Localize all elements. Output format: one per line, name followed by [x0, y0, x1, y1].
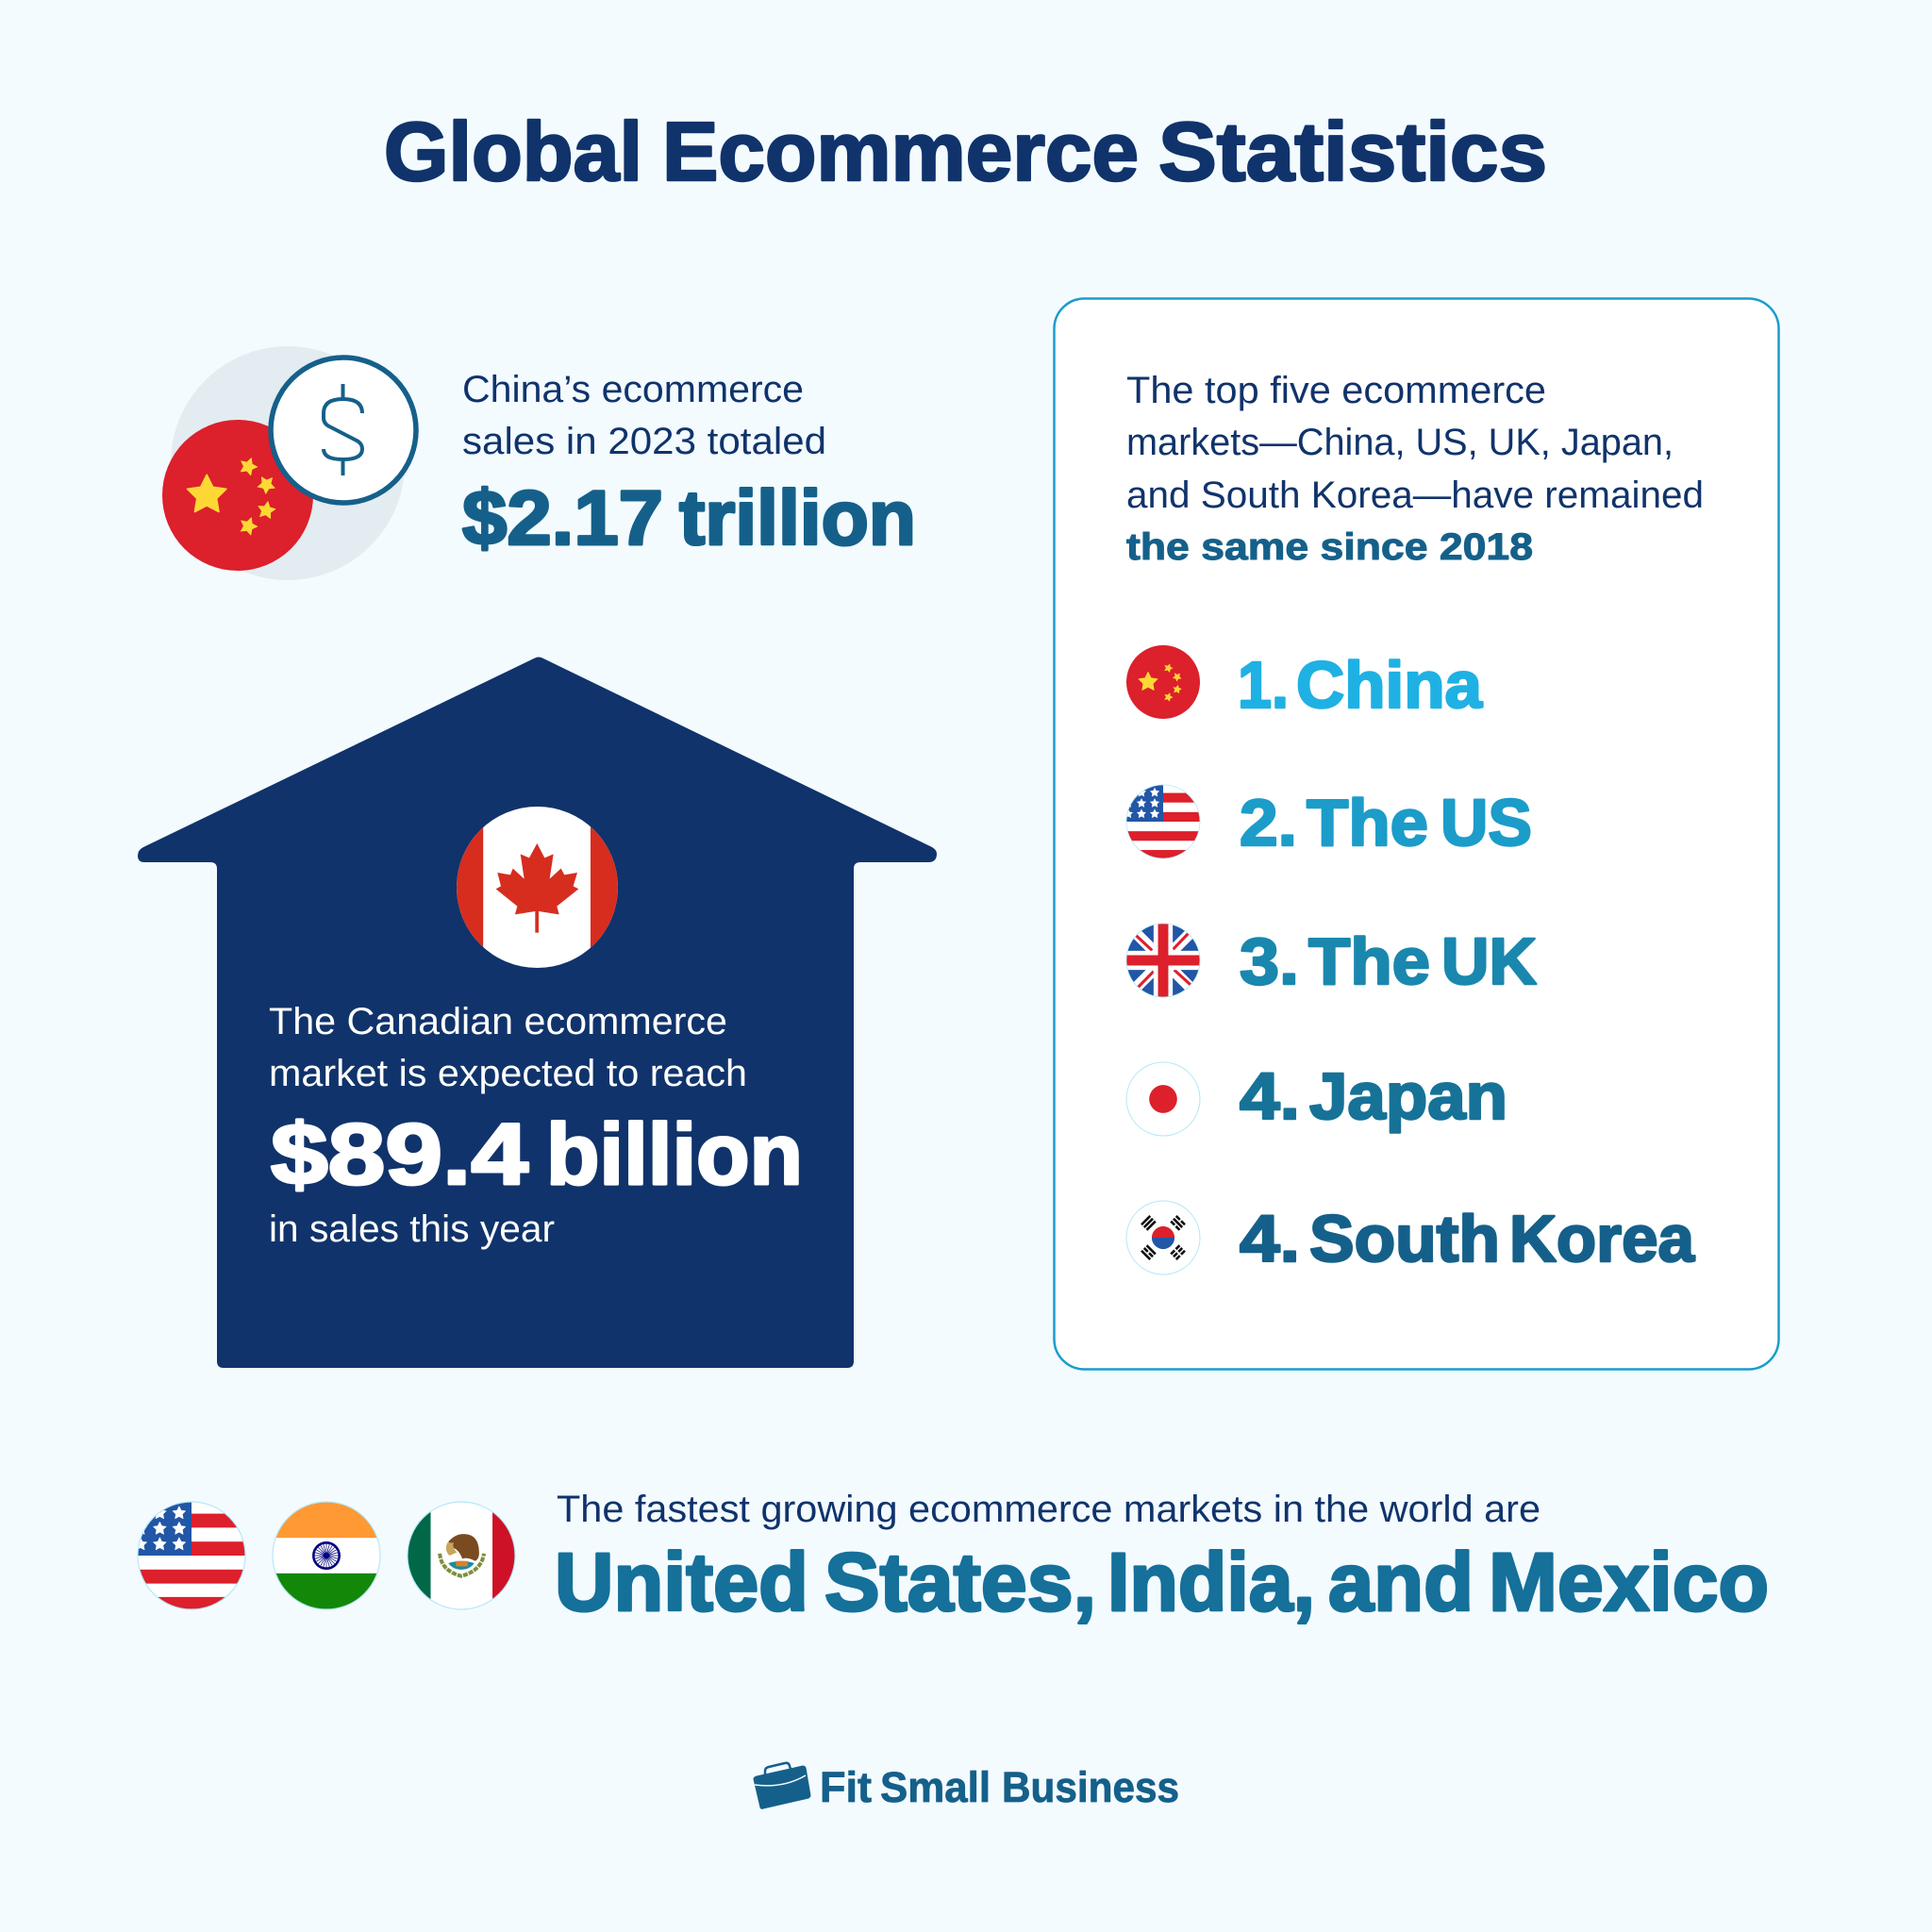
panel: fastest growing markets [134, 1489, 1769, 1628]
list item: china [1126, 645, 1483, 722]
fastest growing text: India, [1108, 1537, 1315, 1628]
list item: south korea [1126, 1201, 1695, 1275]
list item: the US: US [1441, 786, 1532, 859]
logo wordmark [820, 1763, 1179, 1811]
list item: japan [1126, 1059, 1507, 1136]
china text: China’s ecommerce [462, 369, 804, 410]
icon: india flag [273, 1502, 380, 1609]
list item: south korea: South [1309, 1202, 1500, 1275]
house shape [138, 657, 937, 1368]
canada text [269, 1001, 803, 1250]
title [384, 105, 1547, 198]
icon: briefcase [754, 1763, 810, 1808]
list item: the US: 2. [1240, 786, 1297, 859]
fastest growing text: United [555, 1537, 808, 1628]
logo wordmark: Fit [820, 1763, 872, 1811]
list item: south korea: 4. [1240, 1202, 1300, 1275]
fastest growing text: Mexico [1489, 1537, 1769, 1628]
card intro text: and South Korea—have remained [1126, 475, 1704, 516]
fastest growing text: States, [824, 1537, 1096, 1628]
list item: south korea: Korea [1509, 1202, 1695, 1275]
list item: japan: 4. [1240, 1059, 1300, 1133]
card intro text: markets—China, US, UK, Japan, [1126, 422, 1674, 463]
list item: the UK: The [1308, 924, 1430, 998]
fastest growing text: The fastest growing ecommerce markets in the world are [557, 1489, 1541, 1530]
list item: the UK: 3. [1240, 924, 1299, 998]
fastest growing text [555, 1489, 1769, 1628]
card intro text: The top five ecommerce [1126, 370, 1546, 411]
canada text: market is expected to reach [269, 1053, 747, 1094]
icon: canada flag [457, 807, 618, 968]
panel: canada house [138, 657, 937, 1368]
list item: the UK [1126, 924, 1537, 998]
canada text: The Canadian ecommerce [269, 1001, 727, 1042]
icon: mexico flag [408, 1502, 515, 1609]
logo wordmark: Business [1002, 1763, 1179, 1811]
canada text: in sales this year [269, 1208, 555, 1250]
list item: the UK: UK [1441, 924, 1537, 998]
list item: china: 1. [1238, 648, 1289, 722]
title: Global [384, 105, 642, 198]
china text: $2.17 [462, 475, 663, 561]
icon: china flag with dollar coin [162, 346, 416, 580]
panel: top five markets [1055, 298, 1779, 1370]
list item: the US [1124, 785, 1532, 859]
china text [462, 369, 916, 561]
china text: trillion [679, 475, 916, 561]
icon: us flag [134, 1502, 245, 1609]
list item: japan: Japan [1309, 1059, 1507, 1133]
canada text: billion [546, 1107, 803, 1203]
panel: china sales [162, 346, 916, 580]
title: Ecommerce [662, 105, 1139, 198]
list item: the US: The [1307, 786, 1428, 859]
fastest growing text: and [1328, 1537, 1474, 1628]
list item: china: China [1296, 648, 1483, 722]
card intro text: the same since 2018 [1126, 526, 1533, 568]
title: Statistics [1158, 105, 1547, 198]
logo: Fit Small Business [754, 1763, 1179, 1811]
logo wordmark: Small [880, 1763, 991, 1811]
china text: sales in 2023 totaled [462, 421, 826, 462]
card [1055, 298, 1779, 1370]
card intro text [1126, 370, 1704, 568]
canada text: $89.4 [271, 1107, 528, 1203]
